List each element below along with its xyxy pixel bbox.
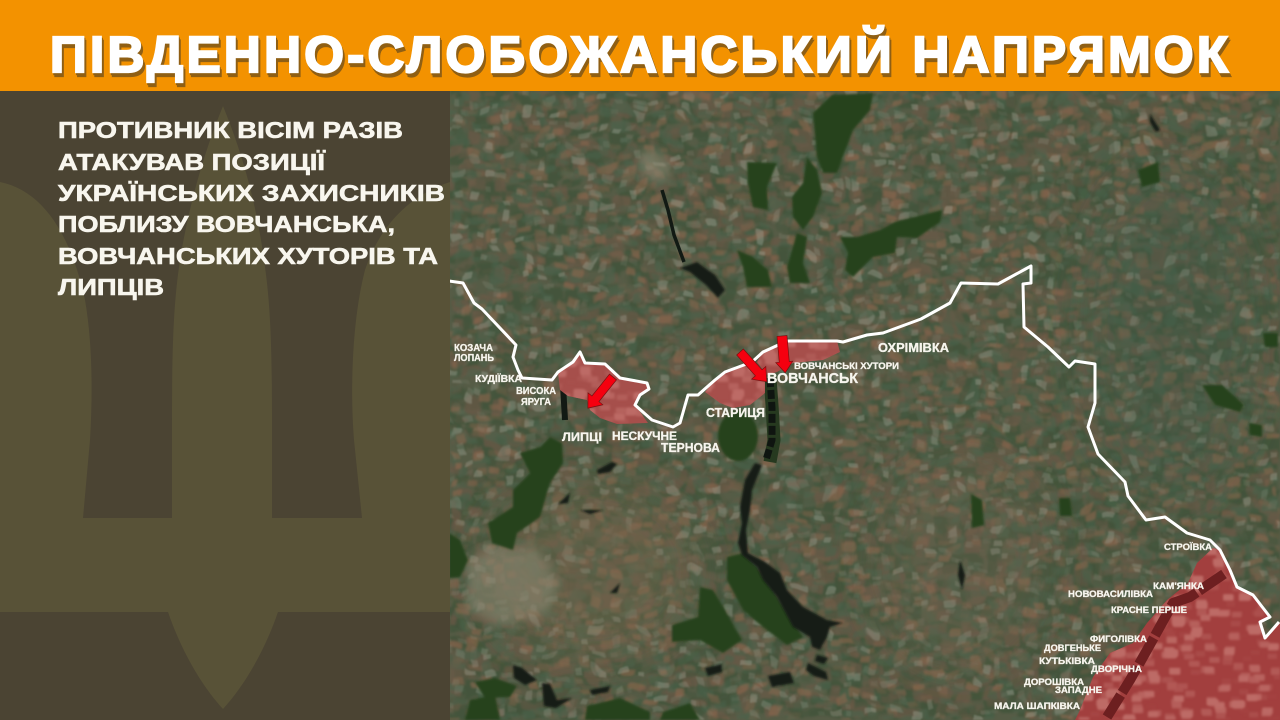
rivers and reservoirs (513, 114, 1160, 708)
body text: ЛИПЦІВ (58, 274, 164, 300)
settlement labels: КРАСНЕ ПЕРШЕ (1111, 605, 1187, 616)
settlement labels: КОЗАЧА (454, 343, 493, 354)
settlement labels: ДОРОШІВКА (1024, 677, 1084, 688)
forests (449, 93, 1278, 720)
settlement labels: СТРОЇВКА (1164, 542, 1212, 553)
settlement labels: ФИГОЛІВКА (1090, 634, 1147, 645)
body text (58, 117, 445, 300)
body text: ПРОТИВНИК ВІСІМ РАЗІВ (58, 117, 403, 143)
left panel (0, 90, 450, 720)
header banner (0, 0, 1280, 91)
settlement labels: КУДІЇВКА (475, 372, 522, 385)
arrow: toward Vovchansk from west (733, 346, 774, 388)
regional colour tint (480, 160, 1260, 670)
settlement labels: ЛОПАНЬ (454, 353, 494, 364)
settlement labels: ВОВЧАНСЬКІ ХУТОРИ (794, 361, 899, 372)
title: ПІВДЕННО-СЛОБОЖАНСЬКИЙ НАПРЯМОК (51, 27, 1230, 85)
settlement labels: ВИСОКА (516, 386, 556, 397)
occupied zone: Kupiansk direction (1075, 548, 1280, 720)
occupied zone: Vovchansk north (757, 341, 840, 375)
settlement labels: МАЛА ШАПКІВКА (994, 701, 1080, 712)
map panel (449, 90, 1280, 720)
arrow: toward Vovchansk from north (774, 335, 794, 374)
title: ПІВДЕННО-СЛОБОЖАНСЬКИЙ НАПРЯМОК (52, 29, 1231, 87)
settlement labels: ЗАПАДНЕ (1055, 685, 1102, 696)
state border line (449, 266, 1279, 638)
body text: АТАКУВАВ ПОЗИЦІЇ (58, 149, 326, 175)
title: ПІВДЕННО-СЛОБОЖАНСЬКИЙ НАПРЯМОК (50, 25, 1229, 83)
settlement labels: КАМ'ЯНКА (1153, 581, 1204, 592)
river inside occupied zone (1107, 574, 1224, 717)
upper river (662, 190, 684, 262)
settlement labels (454, 341, 1212, 712)
settlement labels: КУТЬКІВКА (1039, 656, 1095, 667)
arrow: toward Lyptsi (580, 371, 620, 414)
body text: УКРАЇНСЬКИХ ЗАХИСНИКІВ (58, 180, 445, 206)
settlement labels: ТЕРНОВА (661, 440, 721, 455)
mottled river valley (563, 378, 774, 462)
settlement labels: ОХРІМІВКА (878, 341, 949, 355)
settlement labels: СТАРИЦЯ (706, 405, 765, 420)
occupied zone: Starytsia (705, 362, 765, 408)
settlement labels: ВОВЧАНСЬК (767, 371, 858, 387)
body text: ВОВЧАНСЬКИХ ХУТОРІВ ТА (58, 243, 438, 269)
occupied zone: Lyptsi (558, 352, 649, 424)
settlement labels: НЕСКУЧНЕ (612, 431, 677, 443)
settlement labels: ЛИПЦІ (562, 430, 602, 444)
urban areas (467, 148, 672, 625)
settlement labels: ЯРУГА (521, 397, 551, 408)
settlement labels: ДВОРІЧНА (1091, 664, 1142, 675)
settlement labels: ДОВГЕНЬКЕ (1044, 643, 1101, 654)
trident emblem watermark (0, 106, 450, 709)
body text: ПОБЛИЗУ ВОВЧАНСЬКА, (58, 211, 395, 237)
settlement labels: НОВОВАСИЛІВКА (1068, 589, 1153, 600)
